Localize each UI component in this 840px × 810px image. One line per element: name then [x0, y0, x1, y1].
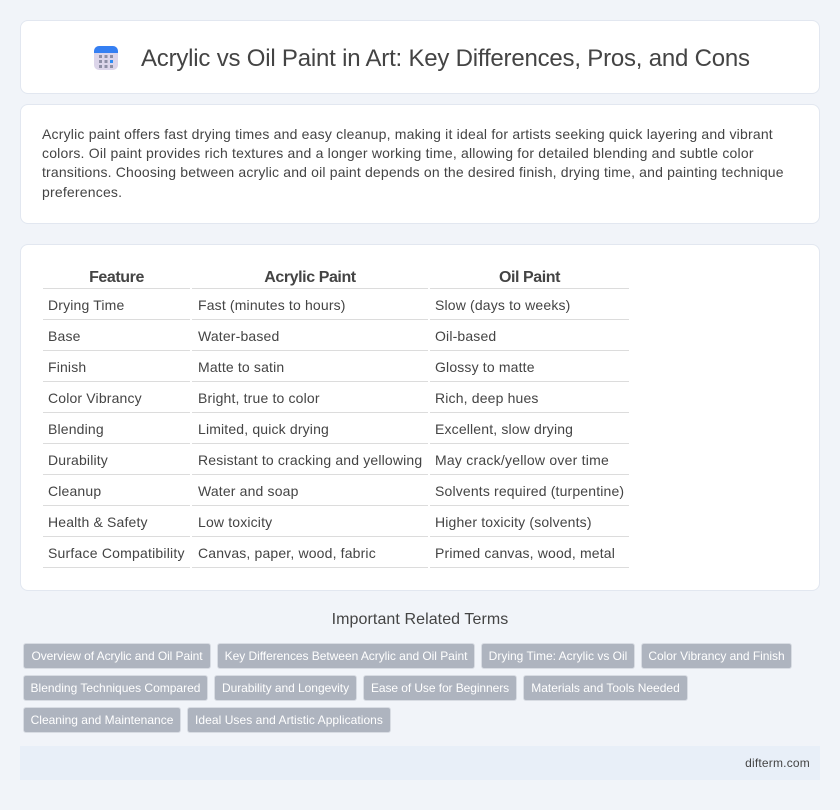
table rows: Fast (minutes to hours): [198, 297, 346, 313]
table rows: Base: [48, 328, 81, 344]
table rows: Matte to satin: [198, 359, 284, 375]
related terms tags: Ideal Uses and Artistic Applications: [195, 713, 383, 727]
table rows: Oil-based: [435, 328, 496, 344]
table rows: Higher toxicity (solvents): [435, 514, 592, 530]
intro text: [42, 126, 784, 200]
table rows: Solvents required (turpentine): [435, 483, 624, 499]
table rows: Color Vibrancy: [48, 390, 142, 406]
related terms tags: Drying Time: Acrylic vs Oil: [489, 649, 627, 663]
table rows: Water and soap: [198, 483, 299, 499]
related terms tags: Key Differences Between Acrylic and Oil Paint: [225, 649, 467, 663]
table rows: Bright, true to color: [198, 390, 320, 406]
table rows: Resistant to cracking and yellowing: [198, 452, 422, 468]
table rows: Cleanup: [48, 483, 101, 499]
table header: Oil Paint: [499, 269, 560, 286]
footer bar: [20, 746, 820, 780]
table rows: Rich, deep hues: [435, 390, 539, 406]
table rows: May crack/yellow over time: [435, 452, 609, 468]
intro text: preferences.: [42, 184, 122, 200]
table rows: Primed canvas, wood, metal: [435, 545, 615, 561]
table rows: Finish: [48, 359, 86, 375]
table header: Feature: [89, 269, 144, 286]
table rows: Durability: [48, 452, 108, 468]
table rows: Slow (days to weeks): [435, 297, 570, 313]
related terms tags: Overview of Acrylic and Oil Paint: [31, 649, 203, 663]
table rows: Health & Safety: [48, 514, 148, 530]
related terms tags: [23, 643, 792, 733]
intro text: colors. Oil paint provides rich textures and a longer working time, allowing for detailed blending and subtle color: [42, 145, 754, 161]
intro text: Acrylic paint offers fast drying times and easy cleanup, making it ideal for artists seeking quick layering and vibrant: [42, 126, 773, 142]
table rows: Canvas, paper, wood, fabric: [198, 545, 376, 561]
related terms tags: Durability and Longevity: [222, 681, 349, 695]
related terms tags: Materials and Tools Needed: [531, 681, 680, 695]
intro panel: [20, 104, 820, 224]
related terms tags: Blending Techniques Compared: [31, 681, 200, 695]
table rows: Water-based: [198, 328, 279, 344]
table rows: Excellent, slow drying: [435, 421, 573, 437]
table rows: [43, 288, 629, 568]
title: Acrylic vs Oil Paint in Art: Key Differences, Pros, and Cons: [141, 45, 750, 72]
related terms tags: Color Vibrancy and Finish: [648, 649, 785, 663]
header panel: [20, 20, 820, 94]
table rows: Drying Time: [48, 297, 124, 313]
table header: [89, 269, 560, 286]
table rows: Limited, quick drying: [198, 421, 329, 437]
table rows: Glossy to matte: [435, 359, 535, 375]
footer source: difterm.com: [745, 756, 810, 770]
icon: palette grid: [94, 46, 118, 70]
related terms tags: Ease of Use for Beginners: [371, 681, 509, 695]
related terms heading: Important Related Terms: [332, 611, 508, 628]
intro text: transitions. Choosing between acrylic and oil paint depends on the desired finish, drying time, and painting technique: [42, 164, 784, 180]
related terms tags: Cleaning and Maintenance: [31, 713, 173, 727]
table rows: Surface Compatibility: [48, 545, 185, 561]
comparison table panel: [20, 244, 820, 591]
table rows: Low toxicity: [198, 514, 272, 530]
table rows: Blending: [48, 421, 104, 437]
table header: Acrylic Paint: [264, 269, 356, 286]
